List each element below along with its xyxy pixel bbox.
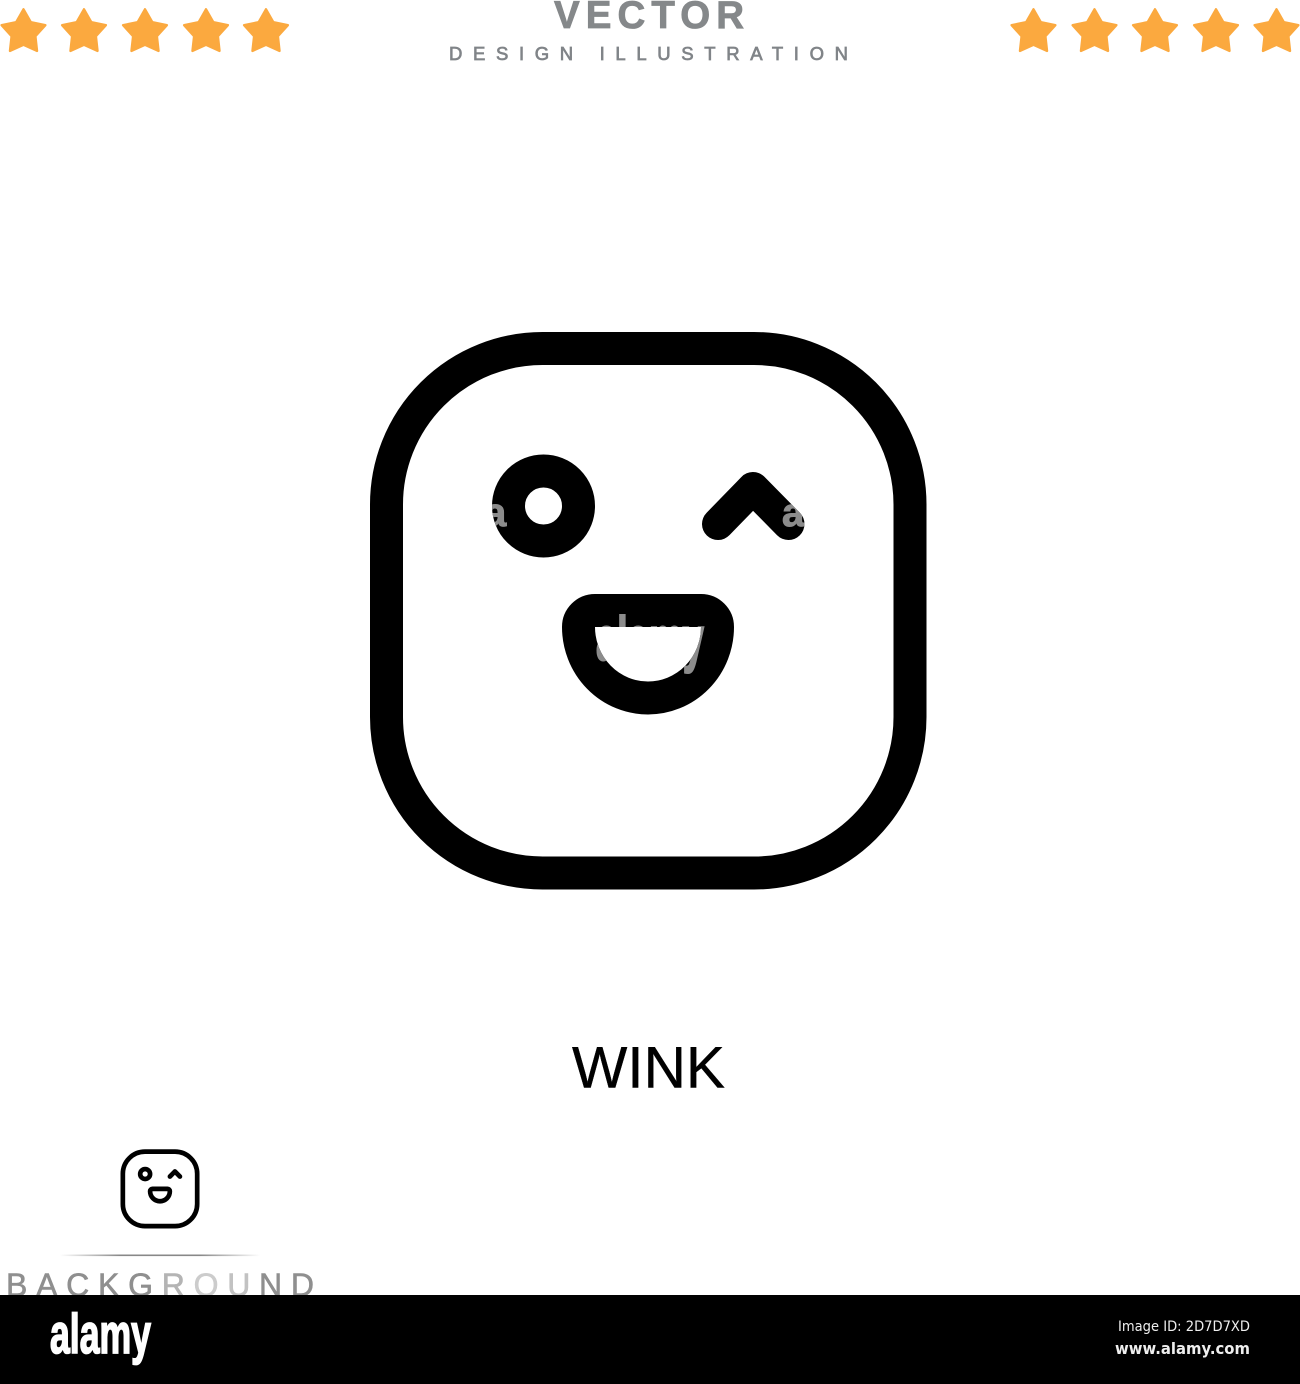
footer text: website: www.alamy.com xyxy=(1115,1339,1250,1358)
icon: open eye xyxy=(508,471,578,541)
watermark showing through the icon: alamy xyxy=(596,605,704,674)
footer text: image id: Image ID: 2D7D7XD xyxy=(1118,1319,1250,1335)
fading rule xyxy=(60,1254,260,1256)
icon title: wink: WINK xyxy=(572,1036,725,1100)
icon outline: rounded square xyxy=(386,348,910,873)
icon: winking eye xyxy=(718,488,788,524)
footer bar xyxy=(0,1295,1300,1384)
footer logo: alamy: alamy xyxy=(50,1302,151,1365)
main icon: wink face xyxy=(386,348,910,873)
watermark showing through the icon: a xyxy=(484,491,507,535)
icon: smiling mouth xyxy=(578,610,718,698)
watermark showing through the icon: a xyxy=(782,491,805,535)
right star rating xyxy=(1012,9,1298,51)
subheading: design illustration: DESIGN ILLUSTRATION xyxy=(449,43,848,64)
small icon preview xyxy=(123,1152,197,1226)
left star rating xyxy=(2,9,288,51)
watermark showing through the icon xyxy=(484,491,805,674)
label: background: BACKG R O U ND xyxy=(6,1267,314,1303)
